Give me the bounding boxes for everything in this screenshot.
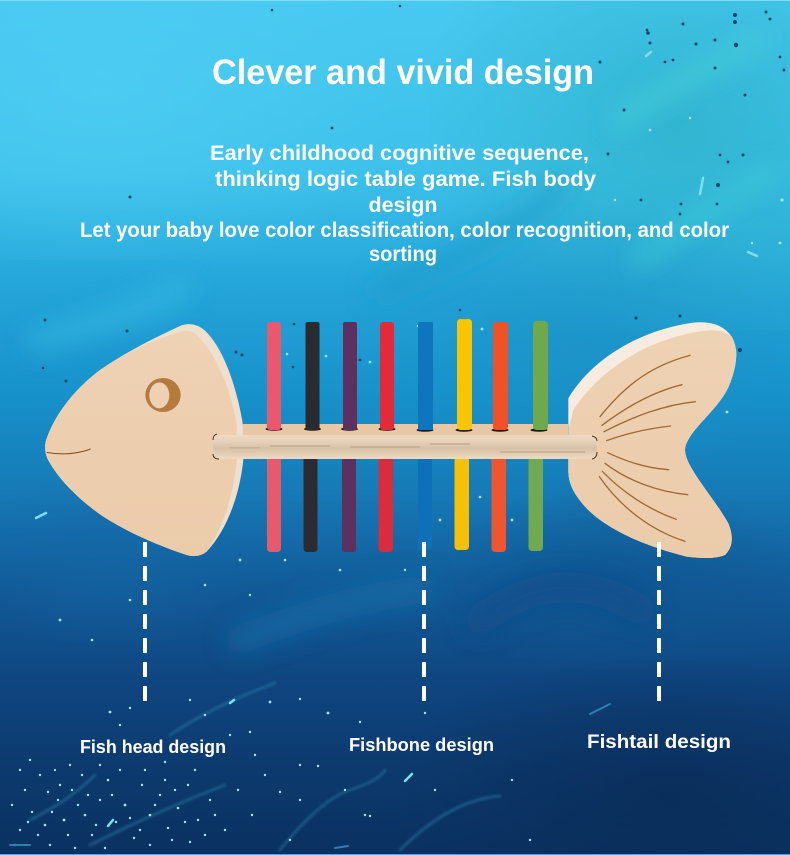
dashed leader: fish head	[143, 542, 147, 702]
fish tail	[568, 322, 736, 558]
fin lines	[599, 355, 695, 541]
upper colored pegs	[267, 319, 548, 430]
eye	[145, 378, 181, 412]
bar top surface and peg holes	[236, 424, 568, 436]
description text block	[80, 142, 729, 266]
dashed leader: fishbone	[422, 542, 426, 702]
lower colored pegs	[267, 450, 543, 552]
fishbone bar front	[213, 434, 597, 459]
title: Clever and vivid design	[212, 53, 594, 92]
label: fishbone design: Fishbone design	[349, 735, 494, 755]
description text block: design	[368, 194, 438, 217]
mouth	[47, 449, 91, 454]
description text block: Let your baby love color classification, color recognition, and color	[80, 219, 729, 242]
label: fish head design: Fish head design	[80, 737, 226, 757]
description text block: thinking logic table game. Fish body	[215, 168, 596, 191]
fish head	[45, 324, 243, 556]
label: fishtail design: Fishtail design	[587, 732, 731, 753]
description text block: sorting	[369, 243, 437, 266]
description text block: Early childhood cognitive sequence,	[210, 142, 589, 165]
wooden fish toy	[45, 319, 736, 558]
dashed leader: fishtail	[657, 542, 661, 702]
dark specks	[42, 5, 785, 382]
